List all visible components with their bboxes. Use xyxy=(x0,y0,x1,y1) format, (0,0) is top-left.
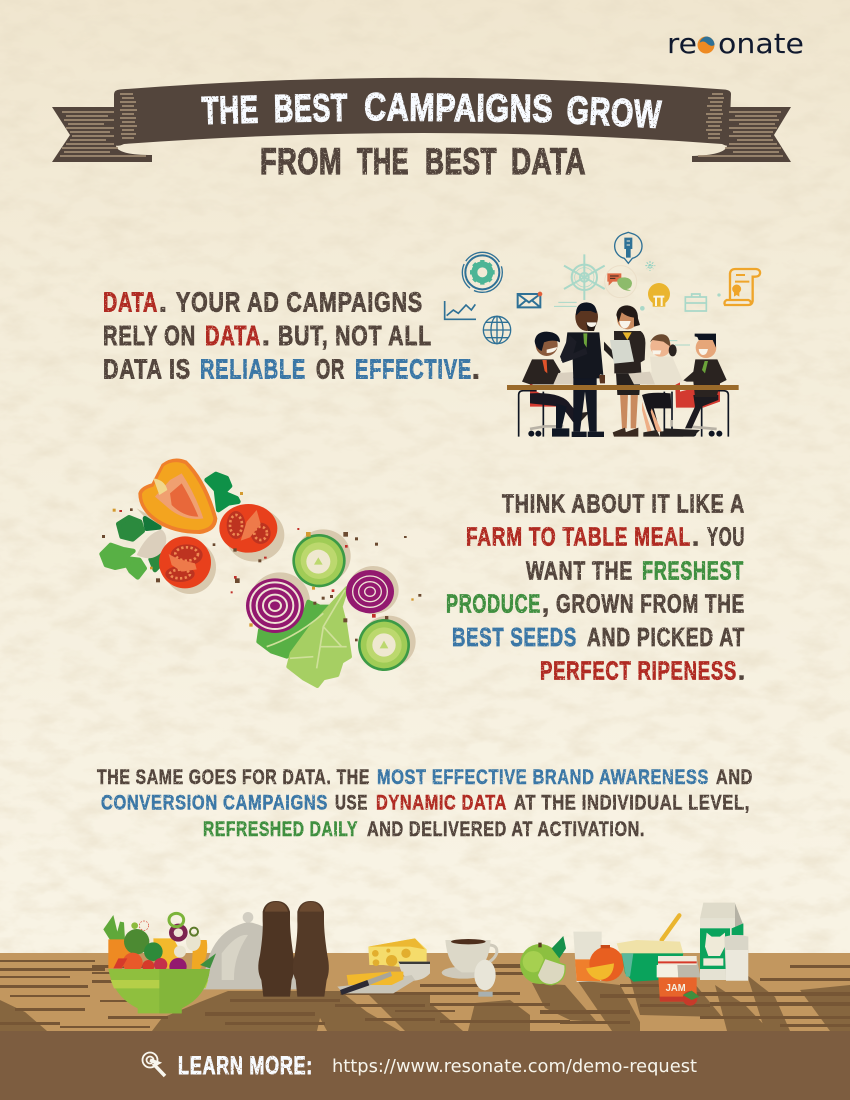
heading: THE xyxy=(201,89,259,133)
text block: intro on data: RELY ON xyxy=(103,320,196,351)
person: standing man xyxy=(560,302,605,437)
faint motion lines xyxy=(554,302,690,345)
text block: farm to table xyxy=(446,490,746,685)
icon: certificate scroll xyxy=(724,269,760,305)
logo: resonate: re xyxy=(667,27,697,60)
text block: farm to table: . xyxy=(738,657,746,685)
green apple xyxy=(520,936,566,985)
food row: left xyxy=(103,901,430,1013)
table shadows xyxy=(0,975,850,1031)
food shadows xyxy=(137,508,416,668)
red onion slices xyxy=(246,570,394,633)
text block: farm to table: AND PICKED AT xyxy=(587,624,745,652)
text block: the same goes for data: MOST EFFECTIVE BRAND AWARENESS xyxy=(377,765,709,789)
text block: farm to table: THINK ABOUT IT LIKE A xyxy=(502,490,745,518)
text block: farm to table: . xyxy=(692,524,700,552)
text block: farm to table: BEST SEEDS xyxy=(452,624,577,652)
url: https://www.resonate.com/demo-request xyxy=(332,1057,697,1077)
table top xyxy=(507,385,739,390)
lettuce leaf xyxy=(258,588,350,686)
text block: farm to table: FARM TO TABLE MEAL xyxy=(466,524,691,552)
heading xyxy=(201,86,663,182)
person: standing woman with clipboard xyxy=(604,305,645,437)
milk carton and glass xyxy=(700,903,748,981)
icon: gear xyxy=(462,252,502,292)
heading: BEST xyxy=(273,87,348,131)
pepper shakers xyxy=(258,901,329,997)
icon: speech bubbles xyxy=(605,266,637,298)
heading: GROW xyxy=(566,89,663,137)
person: seated woman xyxy=(628,334,683,437)
icon: line chart xyxy=(445,301,476,319)
logo: resonate: onate xyxy=(718,27,804,60)
chairs xyxy=(519,375,728,437)
illustration: sliced vegetables xyxy=(102,458,421,686)
person: seated man right xyxy=(661,334,727,437)
text block: farm to table: , xyxy=(542,591,550,619)
tomato: right xyxy=(219,504,277,553)
text block: the same goes for data: REFRESHED DAILY xyxy=(203,817,358,841)
heading: BEST xyxy=(425,141,497,182)
learn more label: LEARN MORE: xyxy=(178,1052,313,1080)
text block: intro on data xyxy=(103,286,481,384)
text block: the same goes for data: USE xyxy=(335,791,368,815)
icon: briefcase xyxy=(685,294,706,311)
spice specks xyxy=(102,508,421,641)
garlic xyxy=(137,529,166,558)
text block: intro on data: EFFECTIVE xyxy=(355,354,472,384)
cucumber slices xyxy=(292,534,410,671)
text block: farm to table: YOU xyxy=(707,524,745,552)
coffee cup and egg xyxy=(442,939,497,997)
heading: THE xyxy=(357,141,409,182)
mixing bowl with spoon xyxy=(617,915,683,982)
text block: farm to table: PERFECT RIPENESS xyxy=(540,657,737,685)
juice glass and orange xyxy=(573,932,624,982)
text block: intro on data: DATA xyxy=(205,320,261,351)
person: seated left xyxy=(522,332,590,437)
text block: farm to table: FRESHEST xyxy=(642,557,744,585)
icon: ship wheel xyxy=(564,254,605,300)
tomato: left xyxy=(159,536,211,588)
cloche xyxy=(203,912,303,989)
herbs xyxy=(102,474,238,577)
footer band xyxy=(0,1031,850,1100)
text block: farm to table: PRODUCE xyxy=(446,591,541,619)
icon: globe xyxy=(483,316,511,344)
icon: cursor with target xyxy=(142,1052,165,1076)
text block: intro on data: . xyxy=(472,354,481,384)
text block: the same goes for data: AND DELIVERED AT ACTIVATION. xyxy=(367,817,645,841)
icon: sparkle xyxy=(645,261,655,271)
text block: intro on data: RELIABLE xyxy=(200,354,306,384)
food row: right xyxy=(442,903,748,1006)
heading: CAMPAIGNS xyxy=(364,86,553,131)
footer call to action xyxy=(142,1052,697,1080)
text block: the same goes for data: CONVERSION CAMPAIGNS xyxy=(101,791,328,815)
text block: the same goes for data: THE SAME GOES FOR DATA. THE xyxy=(97,765,370,789)
text block: intro on data: DATA IS xyxy=(103,354,191,384)
title banner ribbon xyxy=(52,78,791,162)
bell pepper xyxy=(138,458,217,534)
salad bowl xyxy=(108,969,210,1013)
wood grain xyxy=(0,960,850,1028)
text block: farm to table: GROWN FROM THE xyxy=(556,591,745,619)
text block: the same goes for data: AT THE INDIVIDUAL LEVEL, xyxy=(514,791,750,815)
text block: intro on data: BUT, NOT ALL xyxy=(278,320,432,351)
text block: intro on data: YOUR AD CAMPAIGNS xyxy=(176,286,423,318)
text block: farm to table: WANT THE xyxy=(526,557,633,585)
icon: envelope xyxy=(518,292,542,307)
wooden table xyxy=(0,953,850,1031)
text block: the same goes for data xyxy=(97,765,753,841)
icon: blue badge xyxy=(615,232,642,263)
illustration: business team with icons xyxy=(445,232,760,437)
icon: dots xyxy=(640,293,721,311)
text block: the same goes for data: AND xyxy=(716,765,753,789)
jam jar: JAM xyxy=(666,983,686,994)
heading: FROM xyxy=(260,141,342,182)
heading: DATA xyxy=(511,141,586,182)
text block: intro on data: OR xyxy=(316,354,345,384)
text block: intro on data: . xyxy=(159,286,168,318)
salad bowl vegetables xyxy=(103,913,216,975)
icon: light bulb xyxy=(648,283,670,307)
text block: intro on data: . xyxy=(262,320,271,351)
logo: resonate xyxy=(667,27,804,60)
text block: the same goes for data: DYNAMIC DATA xyxy=(376,791,507,815)
text block: intro on data: DATA xyxy=(103,286,158,318)
jam jar xyxy=(657,956,701,1006)
cheese and butter board xyxy=(337,938,430,995)
